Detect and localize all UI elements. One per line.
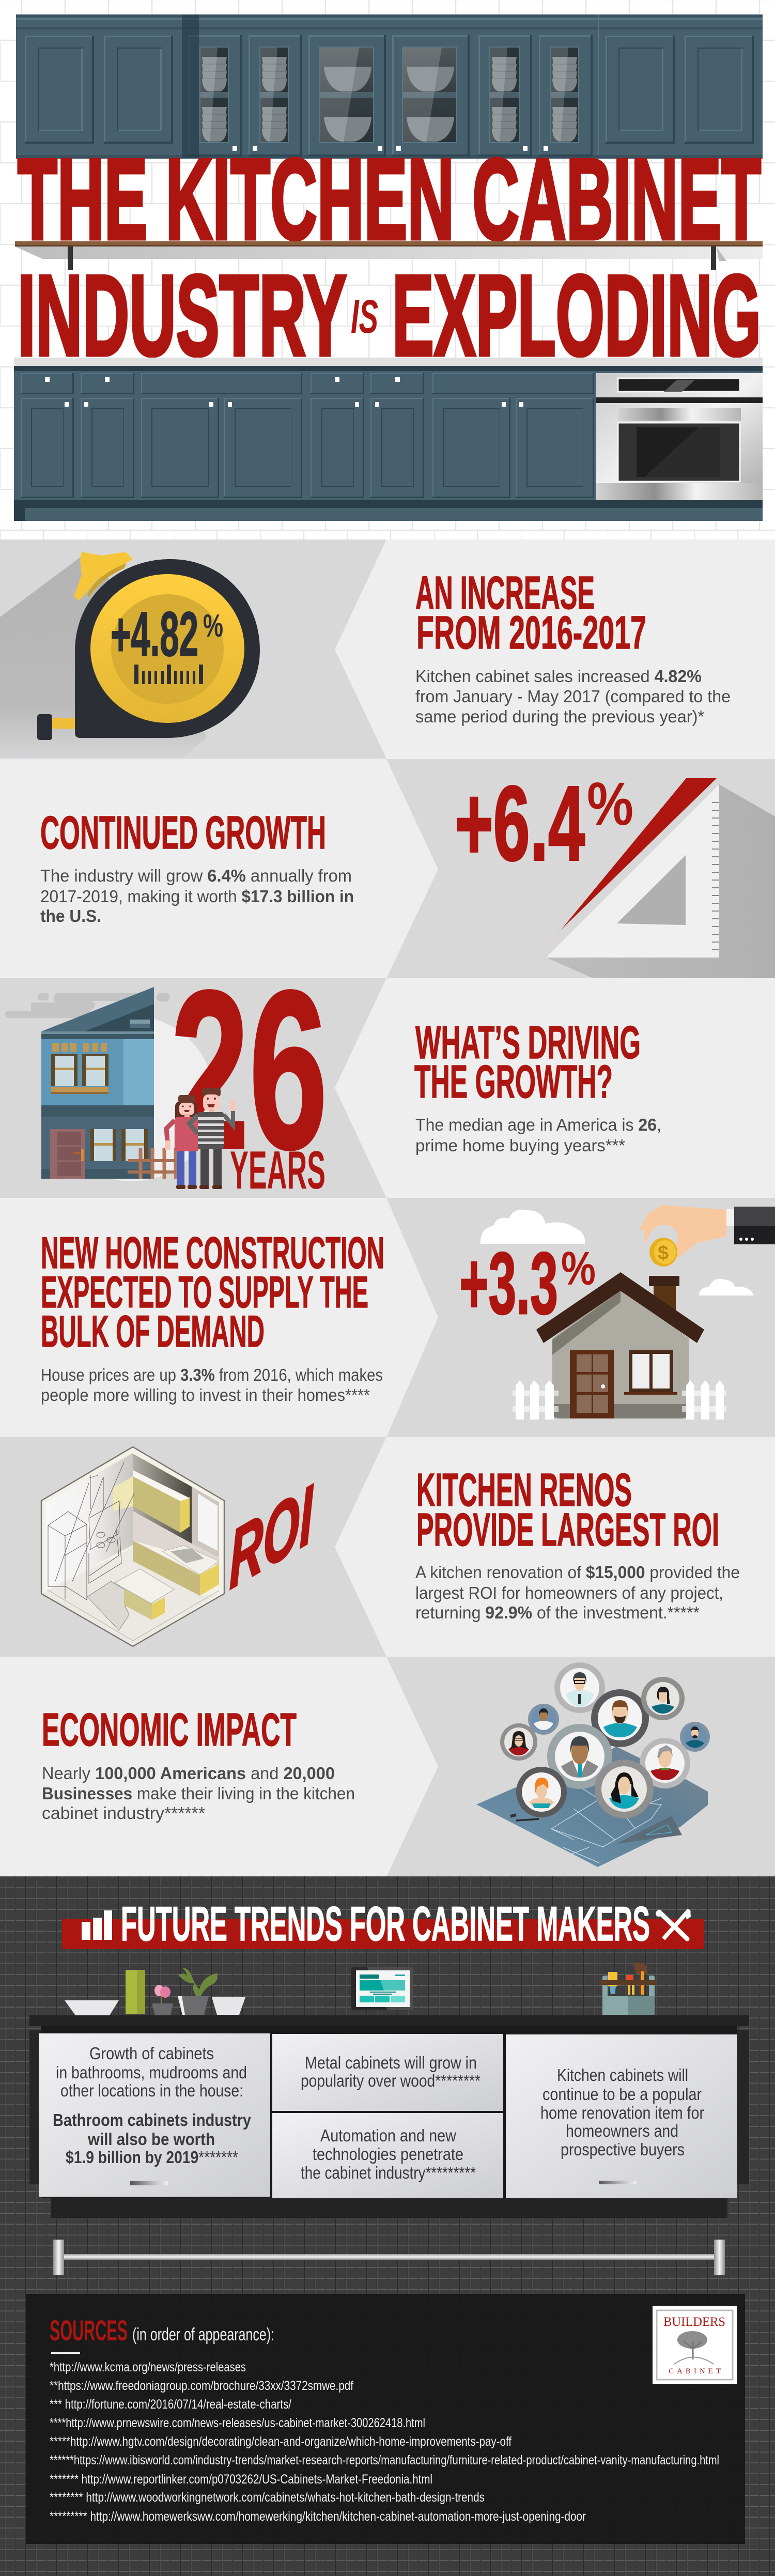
big number 6.4 percent: % — [587, 770, 633, 838]
background: white subway tile wall — [0, 0, 775, 540]
icon: toolbox — [599, 1963, 657, 2015]
sources heading — [50, 2314, 274, 2354]
panel: increase 2016-2017 — [0, 552, 731, 759]
illustration: isometric kitchen — [41, 1447, 224, 1646]
label YEARS: YEARS — [230, 1140, 326, 1200]
source list: ******** http://www.woodworkingnetwork.com/cabinets/whats-hot-kitchen-bath-design-trends — [50, 2490, 485, 2505]
panel: bathrooms and mudrooms: other locations in the house: — [60, 2081, 243, 2100]
panel: bathrooms and mudrooms: Bathroom cabinets industry — [53, 2110, 252, 2130]
body text — [42, 1764, 355, 1823]
source list: ******* http://www.reportlinker.com/p0703262/US-Cabinets-Market-Freedonia.html — [50, 2472, 432, 2487]
panel: kitchen cabinets popular: home renovation item for — [540, 2103, 704, 2122]
icon: tape measure shadow — [0, 556, 207, 759]
blueprint — [476, 1747, 708, 1867]
stainless oven — [596, 373, 763, 500]
title line two: IS — [351, 290, 378, 343]
panel: bathrooms and mudrooms: will also be worth — [87, 2130, 215, 2149]
icon: set square with shadow — [539, 778, 775, 978]
body text: Kitchen cabinet sales increased 4.82% — [415, 667, 702, 686]
avatar: woman top right — [641, 1677, 685, 1720]
sources heading: (in order of appearance): — [132, 2325, 274, 2344]
title line two: INDUSTRY — [18, 252, 347, 380]
panel: kitchen cabinets popular: prospective buyers — [561, 2140, 685, 2159]
panel: bathrooms and mudrooms — [39, 2033, 270, 2197]
panel: metal cabinets: Metal cabinets will grow in — [305, 2053, 477, 2072]
big number 3.3 percent: +3.3 — [459, 1235, 558, 1333]
body text — [41, 1365, 383, 1405]
glass doors with bowls — [189, 35, 593, 157]
heading: BULK OF DEMAND — [41, 1307, 265, 1356]
icon: bars — [82, 1910, 112, 1940]
avatar: grey-haired man — [640, 1738, 690, 1788]
banner: future trends for cabinet makers — [62, 1896, 704, 1951]
panel: new home construction — [41, 1205, 775, 1420]
avatar: man with glasses — [554, 1662, 605, 1713]
panel: bathrooms and mudrooms: in bathrooms, mudrooms and — [56, 2063, 247, 2082]
body text: House prices are up 3.3% from 2016, which makes — [41, 1365, 383, 1384]
avatar: woman in red — [500, 1723, 537, 1761]
panel: kitchen cabinets popular: homeowners and — [566, 2121, 678, 2140]
big 26: 26 — [171, 944, 328, 1196]
icon: tape measure — [37, 552, 260, 740]
icon: house with fence — [513, 1272, 726, 1420]
panel: economic impact — [42, 1662, 710, 1867]
heading: EXPECTED TO SUPPLY THE — [41, 1268, 368, 1317]
body text: from January - May 2017 (compared to the — [415, 687, 731, 706]
body text: The median age in America is 26, — [415, 1115, 661, 1134]
icon: house — [41, 987, 154, 1179]
panel: kitchen cabinets popular: continue to be a popular — [542, 2085, 702, 2104]
heading: AN INCREASE — [415, 567, 595, 619]
illustration: people over blueprint — [476, 1662, 710, 1867]
shelf shadow — [15, 246, 763, 259]
logo: builders cabinet — [653, 2306, 737, 2384]
panel: metal cabinets — [272, 2034, 503, 2111]
avatar: bearded man — [591, 1689, 649, 1747]
icon: hand dropping coin — [639, 1205, 775, 1267]
avatar: woman with orange hair — [516, 1767, 567, 1817]
base doors — [21, 398, 594, 498]
body text: cabinet industry****** — [42, 1803, 205, 1823]
panel: automation: Automation and new — [320, 2126, 456, 2145]
upper plain doors left — [25, 36, 173, 144]
fence — [141, 1148, 176, 1179]
illustration: house, couple and 26 years — [5, 944, 328, 1200]
source list — [50, 2360, 719, 2524]
panel: kitchen renos — [41, 1447, 740, 1646]
body text — [415, 667, 731, 726]
cabinet with trend panels — [29, 2015, 749, 2218]
body text: A kitchen renovation of $15,000 provided the — [415, 1563, 740, 1582]
panel: automation: the cabinet industry********* — [301, 2163, 476, 2182]
body text: returning 92.9% of the investment.***** — [415, 1603, 700, 1622]
icon: tape measure: +4.82 — [111, 599, 198, 669]
panel: kitchen cabinets popular — [506, 2034, 737, 2198]
towel bar — [53, 2240, 725, 2275]
icon: clouds — [481, 1210, 754, 1295]
panel: automation: technologies penetrate — [313, 2145, 463, 2164]
logo: builders cabinet: BUILDERS — [663, 2315, 725, 2329]
body text: 2017-2019, making it worth $17.3 billion in — [40, 887, 354, 906]
heading — [416, 1464, 719, 1556]
panel: what's driving the growth — [5, 944, 661, 1200]
body text: Nearly 100,000 Americans and 20,000 — [42, 1764, 335, 1783]
wooden shelf — [15, 241, 763, 270]
avatar: man small left — [528, 1704, 559, 1735]
drawers — [21, 373, 594, 394]
avatar: man in suit — [547, 1724, 612, 1789]
source list: ********* http://www.homewerksww.com/homewerking/kitchen/kitchen-cabinet-automation-more-just-opening-door — [50, 2509, 586, 2524]
panel: automation — [272, 2113, 503, 2198]
panel: bathrooms and mudrooms: Growth of cabinets — [89, 2044, 214, 2063]
source list: *****http://www.hgtv.com/design/decorating/clean-and-organize/which-home-improvements-pay-off — [50, 2434, 512, 2449]
body text: prime home buying years*** — [415, 1136, 625, 1155]
upper plain doors right — [606, 36, 754, 144]
avatar: man small right — [680, 1722, 710, 1752]
icon: hand dropping coin: $ — [658, 1242, 669, 1264]
body text: Businesses make their living in the kitchen — [42, 1784, 355, 1803]
heading: NEW HOME CONSTRUCTION — [41, 1228, 384, 1278]
source list: *http://www.kcma.org/news/press-releases — [50, 2360, 246, 2374]
icon: wrench and screwdriver — [656, 1909, 691, 1939]
body text: people more willing to invest in their homes**** — [41, 1385, 370, 1405]
logo: builders cabinet: CABINET — [669, 2367, 721, 2376]
body text: The industry will grow 6.4% annually from — [40, 866, 352, 885]
skewed ROI label: ROI — [229, 1467, 314, 1607]
icon: couple — [165, 1088, 235, 1189]
heading — [414, 1017, 641, 1108]
panel: sources — [26, 2294, 745, 2544]
section backgrounds with chevron dividers — [0, 539, 775, 1877]
big number 3.3 percent: % — [561, 1242, 596, 1295]
heading: CONTINUED GROWTH — [40, 807, 326, 859]
avatar: woman with long black hair — [595, 1760, 654, 1818]
source list: **https://www.freedoniagroup.com/brochure/33xx/3372smwe.pdf — [50, 2379, 353, 2393]
panel: kitchen cabinets popular: Kitchen cabinets will — [557, 2065, 688, 2085]
body text — [40, 866, 354, 925]
source list: ****http://www.prnewswire.com/news-releases/us-cabinet-market-300262418.html — [50, 2416, 425, 2430]
heading — [41, 1228, 384, 1356]
source list: *** http://fortune.com/2016/07/14/real-estate-charts/ — [50, 2397, 291, 2412]
shelf decor: vase, plants and pots — [65, 1968, 245, 2015]
panel: bathrooms and mudrooms: $1.9 billion by 2019******* — [66, 2148, 238, 2167]
body text: same period during the previous year)* — [415, 707, 704, 726]
panel: metal cabinets: popularity over wood******** — [301, 2071, 481, 2090]
sources heading: SOURCES — [50, 2314, 128, 2347]
body text — [415, 1115, 661, 1155]
heading: ECONOMIC IMPACT — [42, 1704, 297, 1756]
body text: the U.S. — [40, 906, 101, 925]
lower cabinets and countertop — [14, 358, 763, 521]
upper cabinets — [16, 14, 763, 159]
dark tiled trends section background — [0, 1876, 775, 2576]
big number 6.4 percent: +6.4 — [455, 764, 585, 883]
body text: largest ROI for homeowners of any project, — [415, 1583, 723, 1602]
heading: THE GROWTH? — [414, 1056, 613, 1108]
body text — [415, 1563, 740, 1622]
heading — [415, 567, 646, 659]
icon: tape measure: % — [203, 608, 223, 644]
panel: continued growth — [40, 764, 775, 978]
icon: tablet — [351, 1967, 413, 2010]
